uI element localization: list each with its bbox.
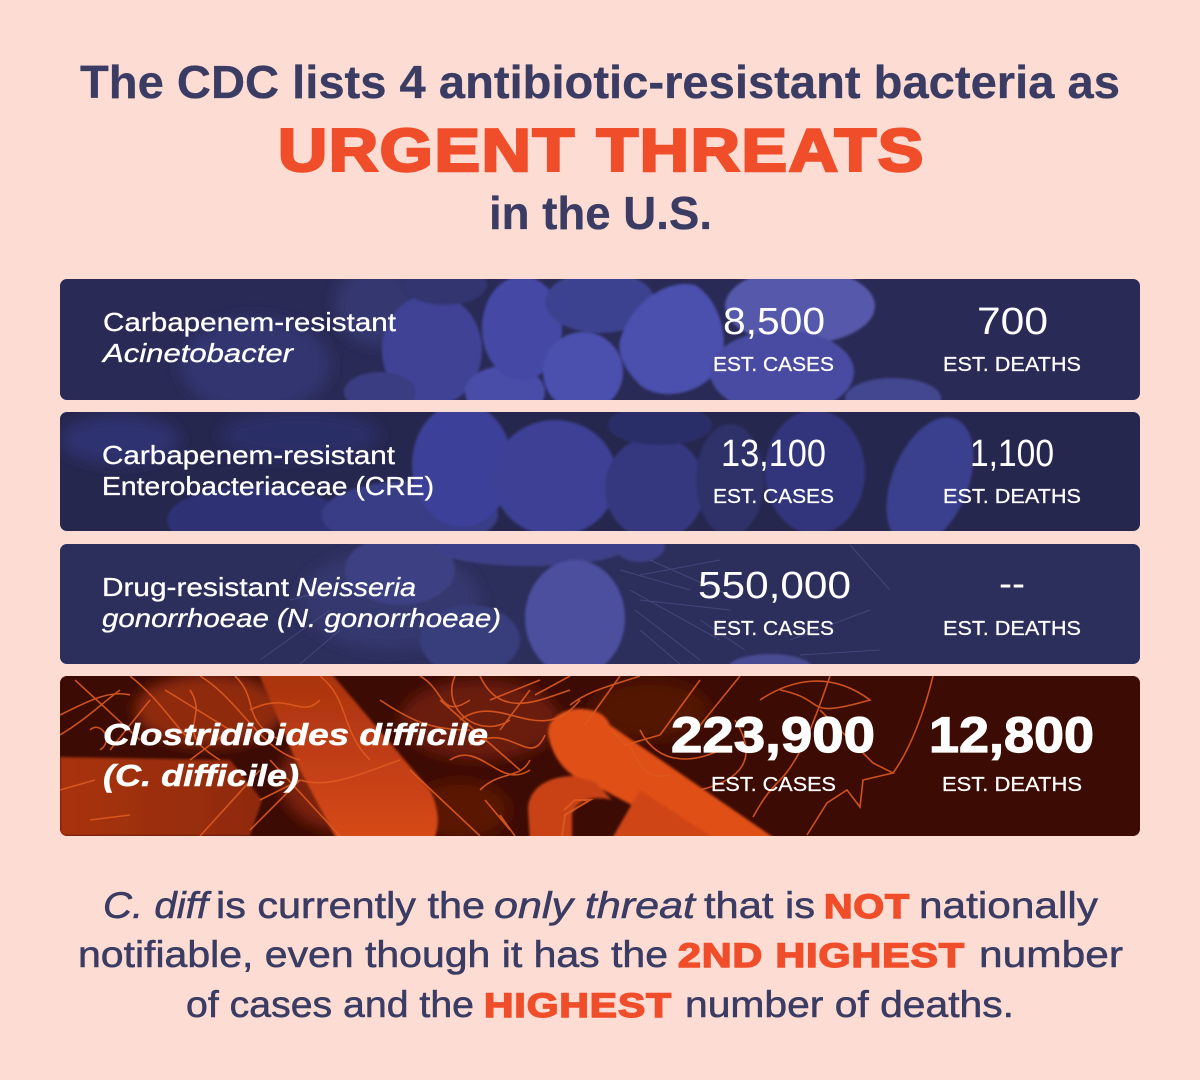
panel label: C. difficile name: Clostridioides difficile xyxy=(103,717,488,752)
stat: deaths unknown: EST. DEATHS xyxy=(943,618,1081,640)
panel label: Acinetobacter name: Carbapenem-resistant xyxy=(103,307,397,337)
panel: Drug-resistant Neisseria gonorrhoeae xyxy=(60,544,1140,664)
panel: Carbapenem-resistant Enterobacteriaceae xyxy=(60,412,1140,531)
stat: cases 8,500: 8,500 xyxy=(723,301,825,343)
title xyxy=(80,56,1120,239)
closing statement: notifiable, even though it has the xyxy=(78,934,668,975)
closing statement: number xyxy=(979,934,1123,975)
stat: cases 550,000 xyxy=(698,565,851,640)
panel label: Neisseria name xyxy=(102,572,501,633)
stat: deaths 700: EST. DEATHS xyxy=(943,354,1081,376)
stat: deaths 12,800 xyxy=(929,707,1094,796)
closing statement: C. diff xyxy=(103,885,212,926)
closing statement: number of deaths. xyxy=(685,984,1014,1025)
stat: deaths 700 xyxy=(943,301,1081,376)
panel: Carbapenem-resistant Acinetobacter xyxy=(60,279,1140,400)
stat: deaths unknown: -- xyxy=(999,563,1025,605)
panel label: C. difficile name: (C. difficile) xyxy=(103,758,299,793)
stat: cases 223,900: 223,900 xyxy=(671,707,875,763)
closing statement: 2ND HIGHEST xyxy=(678,937,965,975)
panel label: Acinetobacter name xyxy=(101,307,397,368)
stat: cases 13,100: EST. CASES xyxy=(713,486,834,508)
panel label: C. difficile name xyxy=(103,717,488,793)
stat: cases 550,000: EST. CASES xyxy=(713,618,834,640)
stat: deaths 1,100: 1,100 xyxy=(970,433,1054,475)
panel label: Neisseria name: gonorrhoeae (N. gonorrhoeae) xyxy=(102,603,501,633)
stat: cases 223,900: EST. CASES xyxy=(711,774,836,796)
stat: deaths 12,800: EST. DEATHS xyxy=(942,774,1082,796)
stat: deaths 12,800: 12,800 xyxy=(929,707,1094,763)
title: in the U.S. xyxy=(489,187,712,239)
title: The CDC lists 4 antibiotic-resistant bacteria as xyxy=(80,56,1120,108)
closing statement: HIGHEST xyxy=(484,987,672,1025)
panel: Clostridioides difficile highlight xyxy=(60,672,1140,842)
panel label: Enterobacteriaceae name: Carbapenem-resistant xyxy=(102,440,396,470)
stat: cases 8,500: EST. CASES xyxy=(713,354,834,376)
closing statement: is currently the xyxy=(216,885,485,926)
closing statement: that is xyxy=(704,885,815,926)
closing statement: only threat xyxy=(494,885,697,926)
panel label: Neisseria name: Drug-resistant xyxy=(102,572,290,602)
panel label: Enterobacteriaceae name xyxy=(102,440,434,501)
title: URGENT THREATS xyxy=(278,117,925,184)
stat: cases 13,100: 13,100 xyxy=(721,433,826,475)
closing statement: NOT xyxy=(824,888,910,926)
stat: deaths 1,100 xyxy=(943,433,1081,508)
panel label: Enterobacteriaceae name: Enterobacteriaceae (CRE) xyxy=(102,471,434,501)
closing statement xyxy=(78,885,1123,1025)
stat: cases 223,900 xyxy=(671,707,875,796)
stat: cases 13,100 xyxy=(713,433,834,508)
stat: deaths unknown xyxy=(943,563,1081,640)
closing statement: of cases and the xyxy=(186,984,474,1025)
stat: deaths 700: 700 xyxy=(977,301,1048,343)
stat: cases 8,500 xyxy=(713,301,834,376)
panel label: Neisseria name: Neisseria xyxy=(296,572,416,602)
stat: deaths 1,100: EST. DEATHS xyxy=(943,486,1081,508)
panel label: Acinetobacter name: Acinetobacter xyxy=(101,338,295,368)
closing statement: nationally xyxy=(919,885,1099,926)
stat: cases 550,000: 550,000 xyxy=(698,565,851,607)
